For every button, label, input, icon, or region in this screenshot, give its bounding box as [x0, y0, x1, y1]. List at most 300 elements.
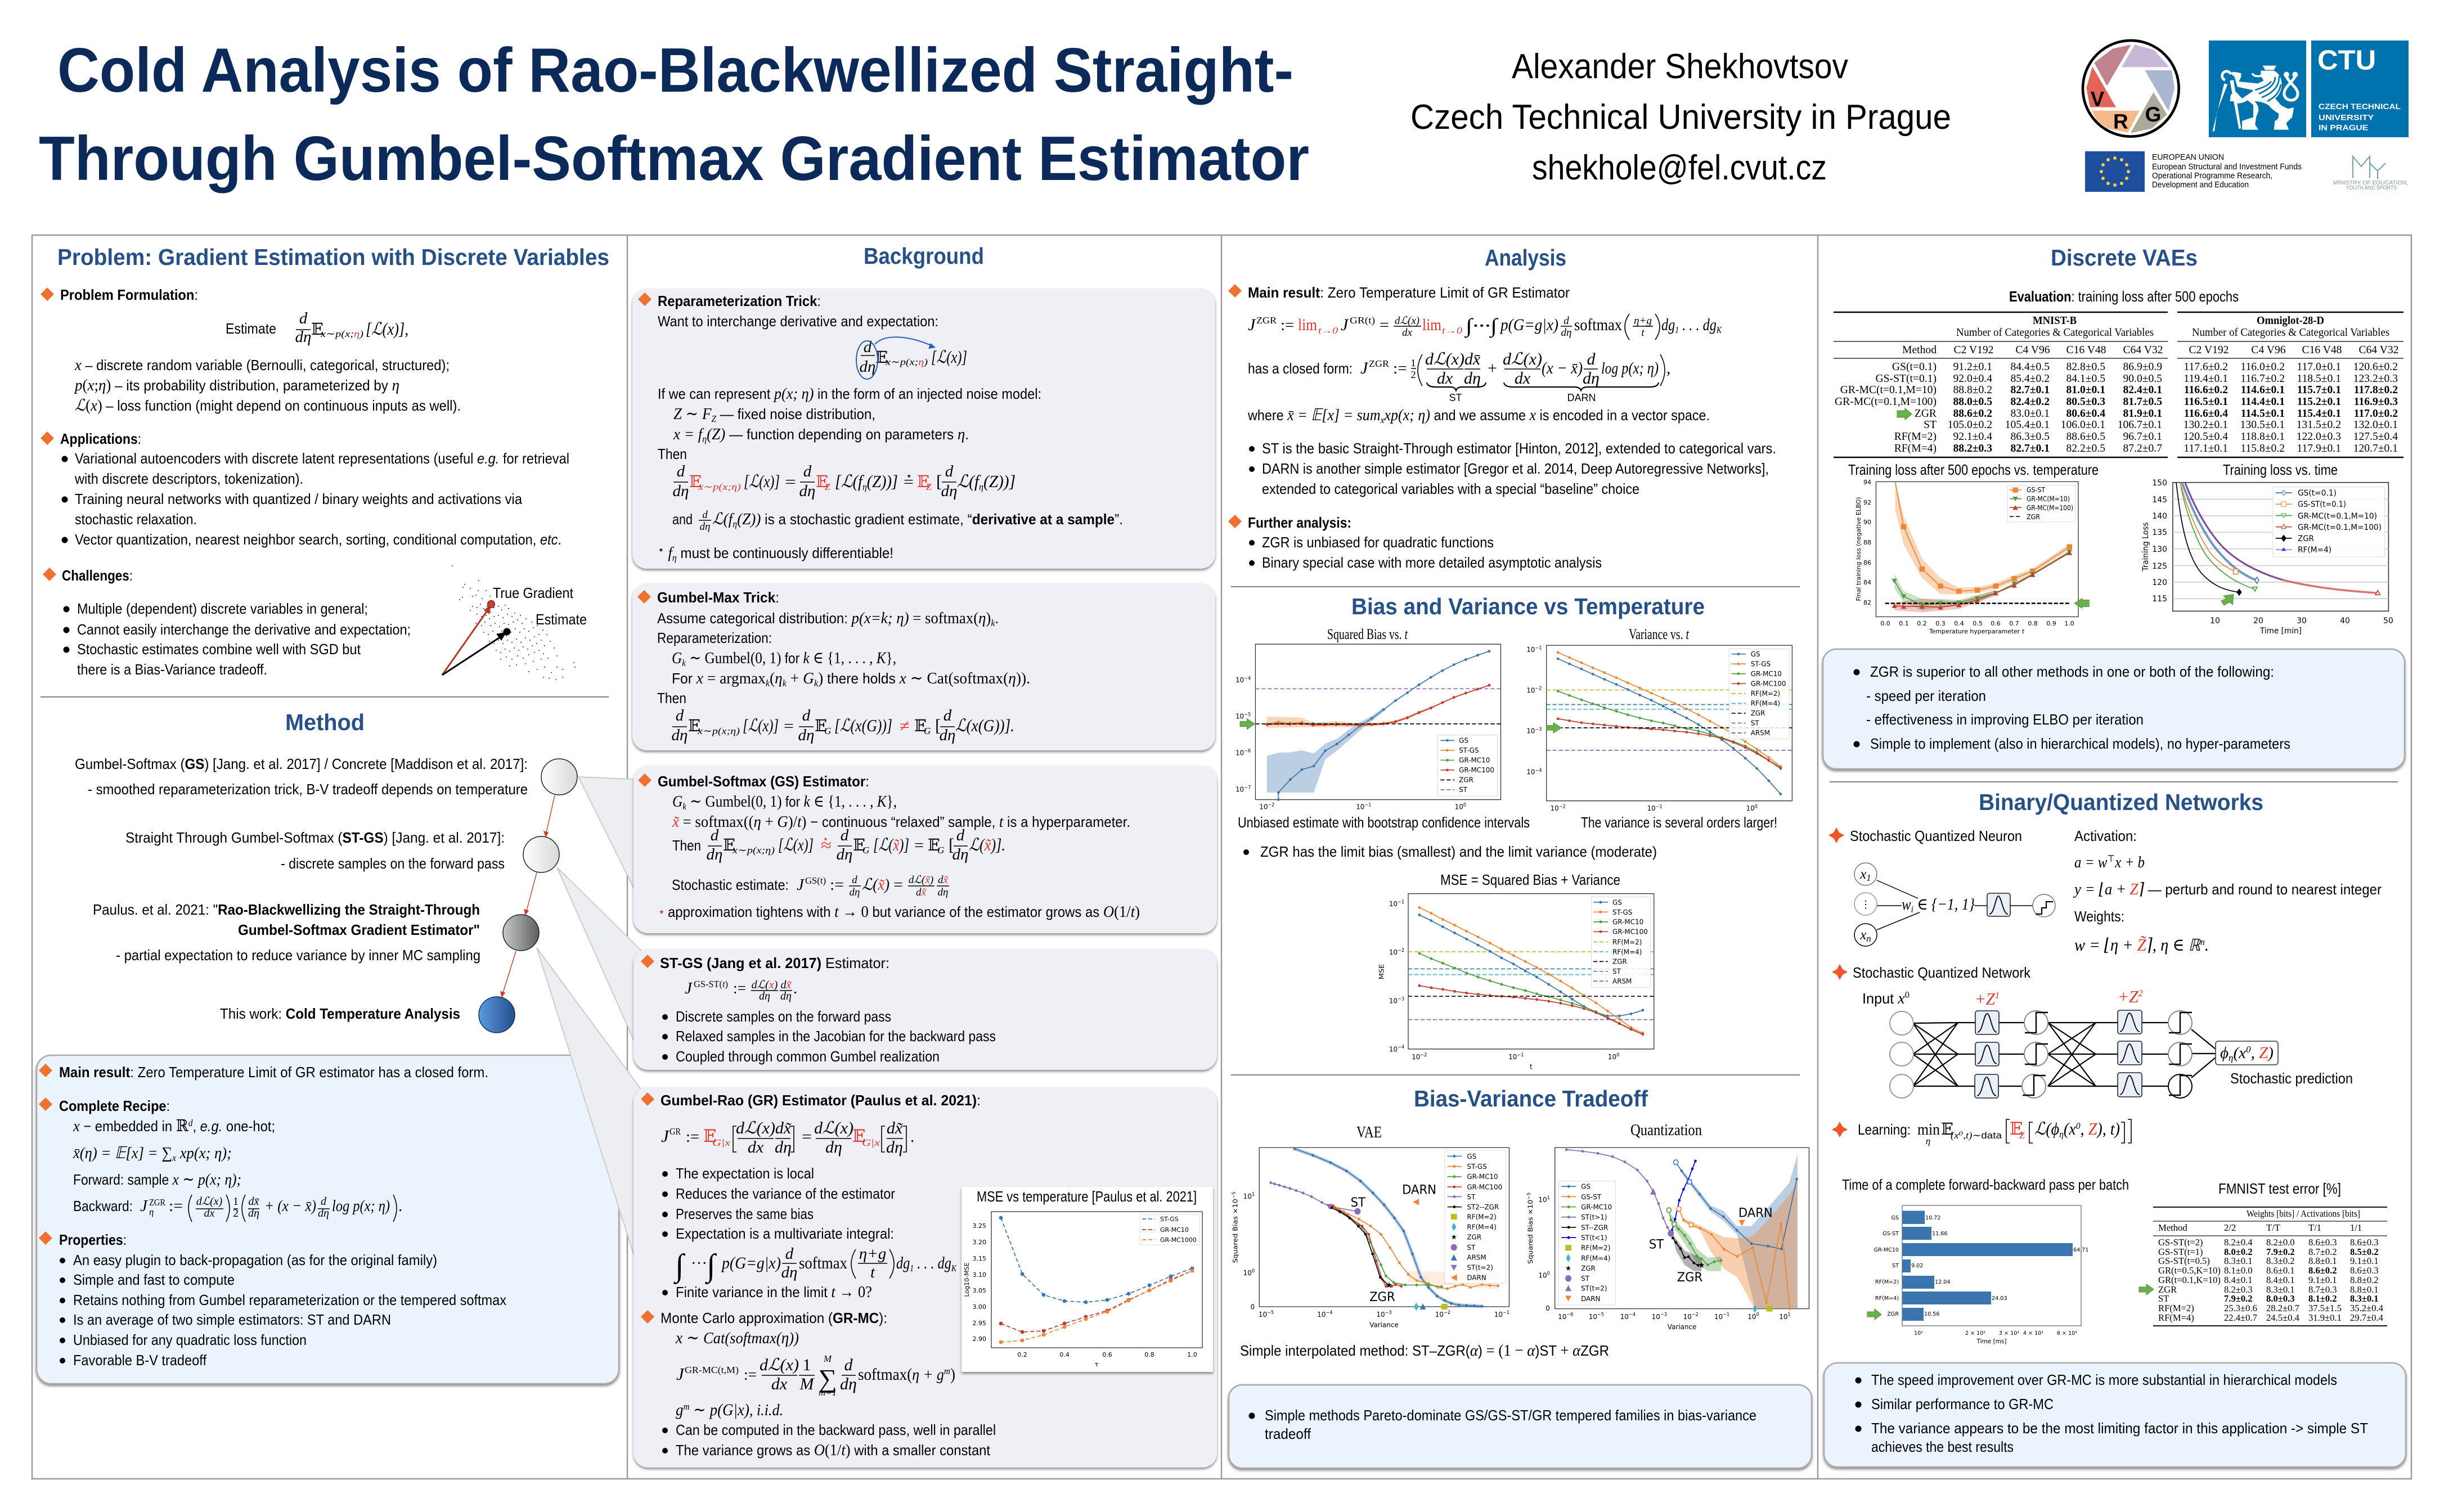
formula: backward: d [321, 1195, 327, 1208]
chart: quantization tradeoff: ★ [1698, 1260, 1705, 1270]
diagram: quantized neuron [1854, 863, 2055, 946]
chart: quantization tradeoff: −1 [1723, 1311, 1729, 1317]
text: properties: An easy plugin to back-propagation (as for the original family) [73, 1252, 437, 1268]
chart: VAE tradeoff: −3 [1385, 1310, 1392, 1315]
table: training loss: 80.6±0.4 [2066, 408, 2105, 420]
chart: VAE tradeoff: ST [1351, 1195, 1366, 1210]
chart: gradient estimate scatter [442, 566, 587, 680]
formula: reparameterization: x∼p(x;η) [698, 482, 741, 492]
formula: J ZGR limit: := [1281, 316, 1294, 334]
callout: speed and performance: The speed improvement over GR-MC is more substantial in hierarchical models [1871, 1371, 2337, 1388]
formula: closed form: dx [1515, 369, 1531, 388]
chart: MSE vs t: RF(M=4) [1612, 948, 1642, 956]
formula: stochastic estimate: J [797, 876, 805, 894]
chart: quantization tradeoff: −2 [1692, 1311, 1699, 1317]
formula: gumbel-softmax then: dη [707, 845, 722, 863]
chart: squared bias vs t: 10 [1236, 676, 1244, 684]
formula: gumbel-max: dη [672, 726, 688, 744]
table: training loss: 114.4±0.1 [2241, 396, 2285, 408]
text: gumbel-max: Assume categorical distribution: p(x=k; η) = softmax(η) [657, 609, 991, 627]
heading: bias and variance: Bias and Variance vs Temperature [1351, 593, 1705, 619]
text: applications: Applications: [60, 430, 141, 447]
chart: MSE vs temperature [962, 1187, 1213, 1372]
text: injected noise: Z ∼ F [673, 405, 712, 423]
chart: loss vs time: 30 [2297, 616, 2307, 626]
chart title: loss vs time: Training loss vs. time [2223, 461, 2338, 478]
chart: timing bars: 24.03 [1992, 1295, 2007, 1302]
diagram: quantized network: ϕ [2220, 1044, 2229, 1062]
heading: bias-variance tradeoff: Bias-Variance Tradeoff [1414, 1086, 1648, 1112]
callout: pareto [1229, 1385, 1812, 1468]
formula: GR-MC: dx [771, 1375, 788, 1393]
table: FMNIST: 9.1±0.1 [2350, 1256, 2379, 1266]
text: gumbel-max: k [682, 658, 686, 668]
text: reparameterization intro: Reparameterization Trick: [658, 292, 821, 309]
formula: gumbel-softmax then [672, 826, 1005, 863]
table: training loss: 117.0±0.1 [2297, 361, 2341, 373]
chart: variance vs t: −3 [1535, 726, 1542, 732]
text: neuron label: Stochastic Quantized Neuron [1850, 827, 2022, 844]
chart: quantization tradeoff: 10 [1652, 1312, 1660, 1321]
chart: MSE vs temperature: 0.6 [1102, 1351, 1112, 1358]
table: FMNIST: 28.2±0.7 [2266, 1303, 2299, 1313]
formula: GR-MC: 1 [802, 1356, 811, 1374]
chart: squared bias vs t: 10 [1236, 713, 1244, 721]
formula: estimate: x∼p(x; η) [320, 328, 363, 339]
table: training loss: GR-MC(t=0.1,M=10) [1840, 384, 1937, 396]
text: challenges [62, 567, 411, 678]
text: gumbel-max: k [783, 678, 787, 688]
list: ST-GS properties [665, 1008, 996, 1065]
formula: reparameterization: d [803, 462, 812, 480]
formula: gumbel-softmax then: ≈ [821, 836, 832, 854]
table: training loss: 85.4±0.2 [2010, 373, 2050, 385]
chart: loss vs time: 50 [2383, 616, 2393, 626]
text: injected noise [658, 385, 1041, 462]
chart: variance vs t: 10 [1526, 646, 1535, 654]
table: FMNIST: 8.8±0.1 [2308, 1256, 2337, 1266]
formula: reparameterization [673, 462, 1016, 500]
chart: loss vs temperature: 94 [1863, 479, 1871, 486]
formula: closed form: (x − x̄) [1542, 359, 1583, 377]
formula: estimate: 𝔼 [311, 321, 324, 339]
formula: GR-MC: ∑ [819, 1364, 837, 1393]
icon: EU flag and funding text [2085, 151, 2302, 192]
icon: VRG logo: G [2145, 103, 2161, 126]
chart: variance vs t: −4 [1535, 767, 1542, 773]
text: properties: Simple and fast to compute [73, 1271, 235, 1288]
text: definitions: ℒ(x) – loss function (might depend on continuous inputs as well). [75, 397, 461, 415]
diagram: quantized neuron: w [1902, 896, 1912, 914]
text: activation equations: n [2200, 937, 2205, 947]
formula: J ZGR limit: J [1248, 316, 1256, 334]
panel: discrete VAEs [1823, 245, 2405, 769]
chart: squared bias vs t: ST-GS [1459, 746, 1479, 754]
formula: circled derivative with arrow: 𝔼 [875, 349, 888, 367]
text: reparameterization intro: Want to interchange derivative and expectation: [658, 313, 938, 330]
formula: gumbel-max: d [944, 706, 952, 724]
formula: gumbel-max: x∼p(x;η) [697, 726, 740, 736]
formula: gumbel-max: [ [935, 716, 941, 735]
chart: quantization tradeoff: 0 [1547, 1270, 1550, 1276]
chart: loss vs temperature: 0.3 [1935, 620, 1946, 627]
panel: bias-variance tradeoff [1229, 1086, 1812, 1468]
callout: pareto: tradeoff [1265, 1425, 1311, 1442]
chart: timing bars: 10.56 [1924, 1311, 1939, 1317]
text: activation equations: Weights: [2074, 908, 2124, 925]
chart: MSE vs t: t [1530, 1063, 1533, 1071]
formula: ST-GS: . [793, 979, 797, 997]
text: injected noise: If we can represent p(x; η) in the form of an injected noise model: [658, 385, 1041, 403]
chart: loss vs temperature: GR-MC(M=100) [2027, 504, 2073, 512]
table: training loss: 115.4±0.1 [2297, 408, 2341, 420]
table: training loss: 82.2±0.5 [2066, 443, 2105, 454]
formula: closed form: 1 [1411, 357, 1416, 368]
table: FMNIST: ST [2158, 1293, 2169, 1304]
icon: diamond bullet [641, 1092, 654, 1106]
formula: gumbel-softmax then: d [841, 826, 849, 844]
table: FMNIST: 8.4±0.1 [2266, 1275, 2295, 1285]
chart: quantization tradeoff: 0 [1546, 1304, 1550, 1312]
formula: backward: Backward: [73, 1198, 133, 1214]
chart: loss vs time: RF(M=4) [2298, 546, 2331, 555]
formula: J GR: := [686, 1128, 699, 1146]
text: challenges: there is a Bias-Variance tradeoff. [77, 661, 267, 678]
formula: learning objective: 𝔼 [2010, 1119, 2023, 1138]
chart: loss vs time: GR-MC(t=0.1,M=10) [2298, 512, 2377, 521]
formula: stochastic estimate: dη [938, 886, 948, 898]
formula: J GR: dx̃ [887, 1119, 903, 1137]
formula: learning objective: Z [2019, 1130, 2025, 1141]
table: training loss: 84.4±0.5 [2010, 361, 2050, 373]
chart: VAE tradeoff: ★ [1386, 1280, 1392, 1290]
chart: timing bars: ST [1892, 1263, 1899, 1269]
table: training loss: 115.8±0.2 [2240, 443, 2285, 454]
text: gumbel-max: G [803, 669, 814, 687]
text: gumbel-max: Reparameterization: [657, 629, 772, 646]
chart: variance vs t: −1 [1535, 645, 1542, 650]
table: FMNIST: GS-ST(t=2) [2158, 1237, 2203, 1248]
formula: GR-MC: dη [840, 1375, 857, 1393]
chart: VAE tradeoff: 10 [1317, 1311, 1326, 1318]
text: definitions [74, 356, 461, 415]
chart: timing bars: 3 × 10¹ [1999, 1330, 2019, 1336]
icon: diamond bullet [1228, 284, 1242, 298]
formula: learning objective: 0 [2076, 1120, 2081, 1131]
chart: timing bars: GR-MC10 [1874, 1247, 1899, 1253]
chart: timing bars: 12.04 [1935, 1279, 1950, 1285]
formula: learning objective: Z), t) [2088, 1119, 2122, 1138]
chart: quantization tradeoff: 1 [1547, 1195, 1550, 1200]
text: problem formulation: Problem Formulation: [60, 286, 198, 303]
chart: VAE tradeoff: RF(M=2) [1467, 1213, 1497, 1221]
chart: variance vs t: −2 [1559, 803, 1566, 809]
formula: gumbel-softmax then: [ℒ(x̃)] [873, 835, 909, 854]
author block: shekhole@fel.cvut.cz [1532, 148, 1827, 187]
formula: ST-GS: dx̃ [781, 979, 792, 991]
formula: J ZGR limit: lim [1422, 316, 1441, 334]
diagram: quantized network: 0 [1905, 989, 1910, 1000]
chart: VAE tradeoff: Squared Bias ×10 [1232, 1199, 1239, 1263]
table: FMNIST: 2/2 [2224, 1222, 2236, 1233]
formula: closed form: ST [1449, 392, 1462, 403]
formula: stochastic estimate: Stochastic estimate: [672, 876, 789, 893]
formula: backward: log p(x; η) [332, 1197, 390, 1215]
chart: MSE vs temperature: 1.0 [1187, 1351, 1197, 1358]
table: FMNIST: 8.6±0.3 [2350, 1237, 2379, 1248]
list: ST and DARN: extended to categorical variables with a special “baseline” choice [1262, 480, 1639, 497]
chart: timing bars [1867, 1205, 2088, 1345]
chart: VAE tradeoff: 0 [1250, 1303, 1255, 1311]
formula: J ZGR limit: t [1641, 327, 1645, 339]
formula: gumbel-softmax then: 𝔼 [928, 836, 940, 854]
formula: GR-MC: GR-MC(t,M) [685, 1365, 739, 1375]
text: complete recipe [59, 1097, 275, 1189]
text: challenges: Cannot easily interchange the derivative and expectation; [77, 621, 411, 638]
text: derivative at a sample [672, 509, 1123, 533]
icon: star bullet [1832, 1122, 1848, 1137]
text: ST-GS heading: ST-GS (Jang et al. 2017) Estimator: [660, 955, 889, 971]
formula: GR-MC: d [844, 1356, 853, 1374]
chart: loss vs temperature: ZGR [2027, 513, 2040, 521]
text: Paulus method [93, 901, 480, 964]
chart: quantization tradeoff: 10 [1538, 1196, 1547, 1204]
chart: variance vs t: 10 [1746, 804, 1755, 812]
diagram: quantized network: 0 [2246, 1044, 2251, 1055]
formula: ST-GS: J [685, 979, 693, 997]
table: training loss: 88.8±0.2 [1953, 384, 1992, 396]
formula: multivariate integral: d [785, 1245, 794, 1263]
table: FMNIST: 7.9±0.2 [2266, 1246, 2295, 1257]
chart: MSE vs t: −1 [1398, 899, 1404, 904]
chart: quantization tradeoff: ST(t>1) [1581, 1213, 1607, 1221]
text: properties: Retains nothing from Gumbel reparameterization or the tempered softmax [73, 1292, 506, 1308]
chart: MSE vs temperature: GR-MC10 [1160, 1226, 1189, 1234]
chart: timing bars: 4 × 10¹ [2023, 1330, 2043, 1336]
formula: learning objective: η [2059, 1129, 2064, 1140]
formula: backward: + (x − x̄) [264, 1197, 316, 1215]
chart: loss vs temperature: 1.0 [2064, 620, 2074, 627]
table: training loss: 123.2±0.3 [2353, 373, 2398, 385]
formula: multivariate integral: t [870, 1263, 875, 1281]
table: training loss: 116.0±0.2 [2240, 361, 2285, 373]
table: training loss: 122.0±0.3 [2297, 431, 2341, 443]
chart title: timing: Time of a complete forward-backward pass per batch [1842, 1176, 2129, 1193]
chart: MSE vs temperature: 0.8 [1144, 1351, 1154, 1358]
chart: variance vs t: 10 [1526, 768, 1535, 776]
chart: MSE vs t: 10 [1389, 900, 1398, 908]
chart: quantization tradeoff: 10 [1589, 1312, 1597, 1321]
text: Paulus method: Paulus. et al. 2021: "Rao-Blackwellizing the Straight-Through [93, 901, 480, 918]
formula: backward: ZGR [149, 1197, 166, 1208]
author block: Alexander Shekhovtsov [1512, 47, 1848, 86]
table: FMNIST: GS-ST(t=1) [2158, 1246, 2203, 1257]
formula: J ZGR limit: ZGR [1256, 315, 1277, 326]
table: training loss: 130.2±0.1 [2184, 419, 2228, 431]
formula: gumbel-max: 𝔼 [815, 717, 827, 735]
chart: quantization tradeoff: 10 [1538, 1271, 1547, 1279]
formula: multivariate integral: softmax [799, 1254, 847, 1272]
text: gumbel-max: G [672, 649, 682, 667]
table: training loss: 92.0±0.4 [1953, 373, 1992, 385]
formula: gumbel-softmax then: [ [949, 835, 954, 854]
chart: loss vs time: 115 [2152, 595, 2167, 604]
text: where clause: and we assume x is encoded in a vector space. [1434, 406, 1729, 424]
chart: quantization tradeoff: −5 [1597, 1311, 1604, 1317]
node: ST-GS ellipse [523, 836, 559, 872]
table: FMNIST: 8.3±0.1 [2224, 1256, 2253, 1266]
chart: quantization tradeoff: ST--ZGR [1581, 1223, 1609, 1231]
chart: squared bias vs t: −5 [1244, 712, 1251, 717]
text: gumbel-max: Gumbel-Max Trick: [657, 589, 779, 606]
table: FMNIST: 1/1 [2350, 1222, 2362, 1233]
chart: VAE tradeoff: −5 [1231, 1191, 1236, 1199]
chart: MSE vs t: 10 [1389, 1045, 1398, 1053]
chart title: variance: Variance vs. t [1629, 626, 1690, 642]
table: training loss: RF(M=4) [1894, 443, 1937, 454]
formula: circled derivative with arrow [856, 337, 967, 379]
diagram: quantized neuron: ∈ {−1, 1} [1913, 896, 1975, 914]
chart: loss vs time: ZGR [2298, 534, 2314, 543]
formula: reparameterization: η [862, 482, 867, 492]
text: complete recipe: x̄(η) = 𝔼[x] = ∑ [73, 1144, 181, 1162]
icon: diamond bullet [637, 590, 651, 604]
text: gumbel-max: ( [770, 669, 775, 687]
panel: gumbel-rao estimator [634, 1087, 1217, 1468]
icon: EU flag and funding text: EUROPEAN UNION [2152, 152, 2224, 162]
chart: VAE tradeoff: ST [1467, 1192, 1476, 1201]
icon: diamond bullet [39, 1231, 52, 1245]
chart: VAE tradeoff: ST(t=2) [1467, 1263, 1493, 1272]
formula: J ZGR limit: GR(t) [1350, 315, 1375, 326]
callout: speed and performance: The variance appears to be the most limiting factor in this application -> simple ST [1871, 1420, 2368, 1437]
callout: speed and performance: achieves the best results [1871, 1438, 2014, 1455]
table: training loss: 81.9±0.1 [2123, 408, 2162, 420]
chart: squared bias vs t: 10 [1356, 803, 1364, 811]
table: training loss: 116.7±0.2 [2240, 373, 2285, 385]
table: training loss: 82.4±0.2 [2010, 396, 2050, 408]
formula: gumbel-softmax then: dη [837, 845, 852, 863]
text: complete recipe: e.g. one-hot; [200, 1118, 280, 1135]
formula: circled derivative with arrow: x∼p(x; η) [885, 357, 928, 367]
chart: squared bias vs t: 10 [1455, 803, 1463, 811]
callout wedges linking method nodes to background boxes [537, 777, 643, 1282]
table: training loss: Number of Categories & Categorical Variables [1956, 327, 2154, 339]
text: gumbel-max: η [775, 669, 783, 687]
formula: reparameterization: ℒ(f [957, 471, 980, 491]
chart: squared bias vs t: GR-MC100 [1459, 766, 1494, 774]
table: FMNIST: 8.3±0.2 [2266, 1256, 2295, 1266]
title: Through Gumbel-Softmax Gradient Estimator [39, 124, 1309, 194]
text: monte carlo heading [661, 1310, 887, 1347]
table: training loss: 115.7±0.1 [2297, 384, 2341, 396]
list: GR-MC notes: m [683, 1401, 690, 1412]
text: activation equations: Activation: [2074, 827, 2137, 844]
icon: ministry logo [2333, 156, 2408, 191]
text: injected noise: — function depending on parameters η. [729, 425, 970, 443]
icon: diamond bullet [638, 773, 652, 787]
chart: VAE tradeoff: 10 [1376, 1311, 1385, 1318]
formula: backward: 1 [233, 1195, 239, 1208]
formula: J GR: 𝔼 [852, 1126, 866, 1146]
chart: timing bars: 64.71 [2073, 1247, 2088, 1253]
icon: diamond bullet [41, 287, 54, 301]
text: complete recipe: d [188, 1118, 193, 1128]
table: training loss: C4 V96 [2251, 344, 2286, 356]
table: FMNIST: ZGR [2158, 1284, 2177, 1295]
table: training loss: Omniglot-28-D [2257, 314, 2324, 327]
chart: VAE tradeoff: ST2--ZGR [1467, 1203, 1499, 1211]
text: where clause: x [1380, 415, 1385, 425]
formula: reparameterization: (Z))] [983, 471, 1016, 491]
table: FMNIST: GR(t=0.1,K=10) [2158, 1275, 2221, 1285]
formula: multivariate integral: dη [781, 1263, 797, 1281]
chart: VAE tradeoff: ARSM [1467, 1253, 1486, 1261]
chart: variance vs t [1526, 645, 1792, 812]
chart: MSE vs t: 10 [1608, 1053, 1616, 1061]
list: further analysis: ZGR is unbiased for quadratic functions [1262, 534, 1494, 551]
chart title: FMNIST: FMNIST test error [%] [2218, 1180, 2341, 1197]
author block: Czech Technical University in Prague [1410, 98, 1951, 137]
chart: variance vs t: 10 [1526, 727, 1535, 735]
chart: loss vs temperature: 82 [1863, 599, 1871, 606]
panel: ST-GS estimator [634, 949, 1217, 1070]
table: training loss: ZGR [1915, 408, 1937, 420]
diagram: quantized neuron: n [1866, 933, 1871, 944]
formula: multivariate integral: K [951, 1263, 957, 1274]
chart: MSE vs temperature: 3.00 [972, 1303, 986, 1311]
formula: GR-MC: M [799, 1375, 815, 1393]
text: GS method: Gumbel-Softmax (GS) [Jang. et al. 2017] / Concrete [Maddison et al. 2017]: [75, 755, 528, 772]
list: ST and DARN: DARN is another simple estimator [Gregor et al. 2014, Deep Autoregressive Networks], [1262, 460, 1769, 477]
heading: background: Background [864, 243, 984, 269]
icon: CTU logo: UNIVERSITY [2319, 112, 2374, 122]
chart: VAE tradeoff: DARN [1402, 1183, 1436, 1197]
table: training loss: C64 V32 [2359, 344, 2398, 356]
text: GS method: - smoothed reparameterization trick, B-V tradeoff depends on temperature [88, 781, 528, 798]
text: applications: with discrete descriptors, tokenization). [74, 470, 303, 487]
formula: estimate: Estimate [226, 320, 276, 337]
formula: gumbel-softmax then: d [711, 826, 719, 844]
chart: MSE vs t: GR-MC100 [1612, 928, 1648, 936]
chart: squared bias vs t [1236, 644, 1500, 811]
table: training loss [1834, 312, 2403, 457]
table: training loss: 86.9±0.9 [2123, 361, 2162, 373]
chart: loss vs time: 20 [2253, 616, 2263, 626]
formula: backward [73, 1195, 402, 1222]
formula: closed form: 2 [1411, 369, 1416, 380]
text: simple interpolated method: Simple interpolated method: ST–ZGR(α) = (1 − α)ST + αZGR [1240, 1342, 1609, 1360]
formula: gumbel-softmax then: d [956, 826, 965, 844]
chart: timing bars: 11.66 [1932, 1231, 1947, 1237]
text: complete recipe: xp(x; η); [176, 1144, 232, 1162]
chart: VAE tradeoff: GS [1467, 1152, 1476, 1160]
formula: gumbel-max: d [676, 706, 684, 724]
formula: closed form: d [1587, 350, 1596, 368]
chart: quantization tradeoff: −3 [1660, 1311, 1667, 1317]
table: FMNIST: 8.6±0.2 [2308, 1265, 2337, 1276]
formula: stochastic estimate: dℒ(x̃) [909, 874, 933, 886]
chart: MSE vs t: 10 [1412, 1053, 1420, 1061]
formula: J ZGR limit: 1 [1675, 325, 1679, 335]
chart: quantization tradeoff: RF(M=4) [1581, 1254, 1610, 1262]
formula: closed form: has a closed form: [1248, 360, 1353, 377]
chart: MSE vs temperature: 2.90 [972, 1335, 986, 1343]
chart: MSE vs t: ARSM [1612, 977, 1632, 986]
chart: loss vs temperature: 0.2 [1917, 620, 1927, 627]
list: GR-MC notes: The variance grows as O(1/t) with a smaller constant [676, 1441, 991, 1459]
text: ST-GS method [125, 829, 505, 872]
